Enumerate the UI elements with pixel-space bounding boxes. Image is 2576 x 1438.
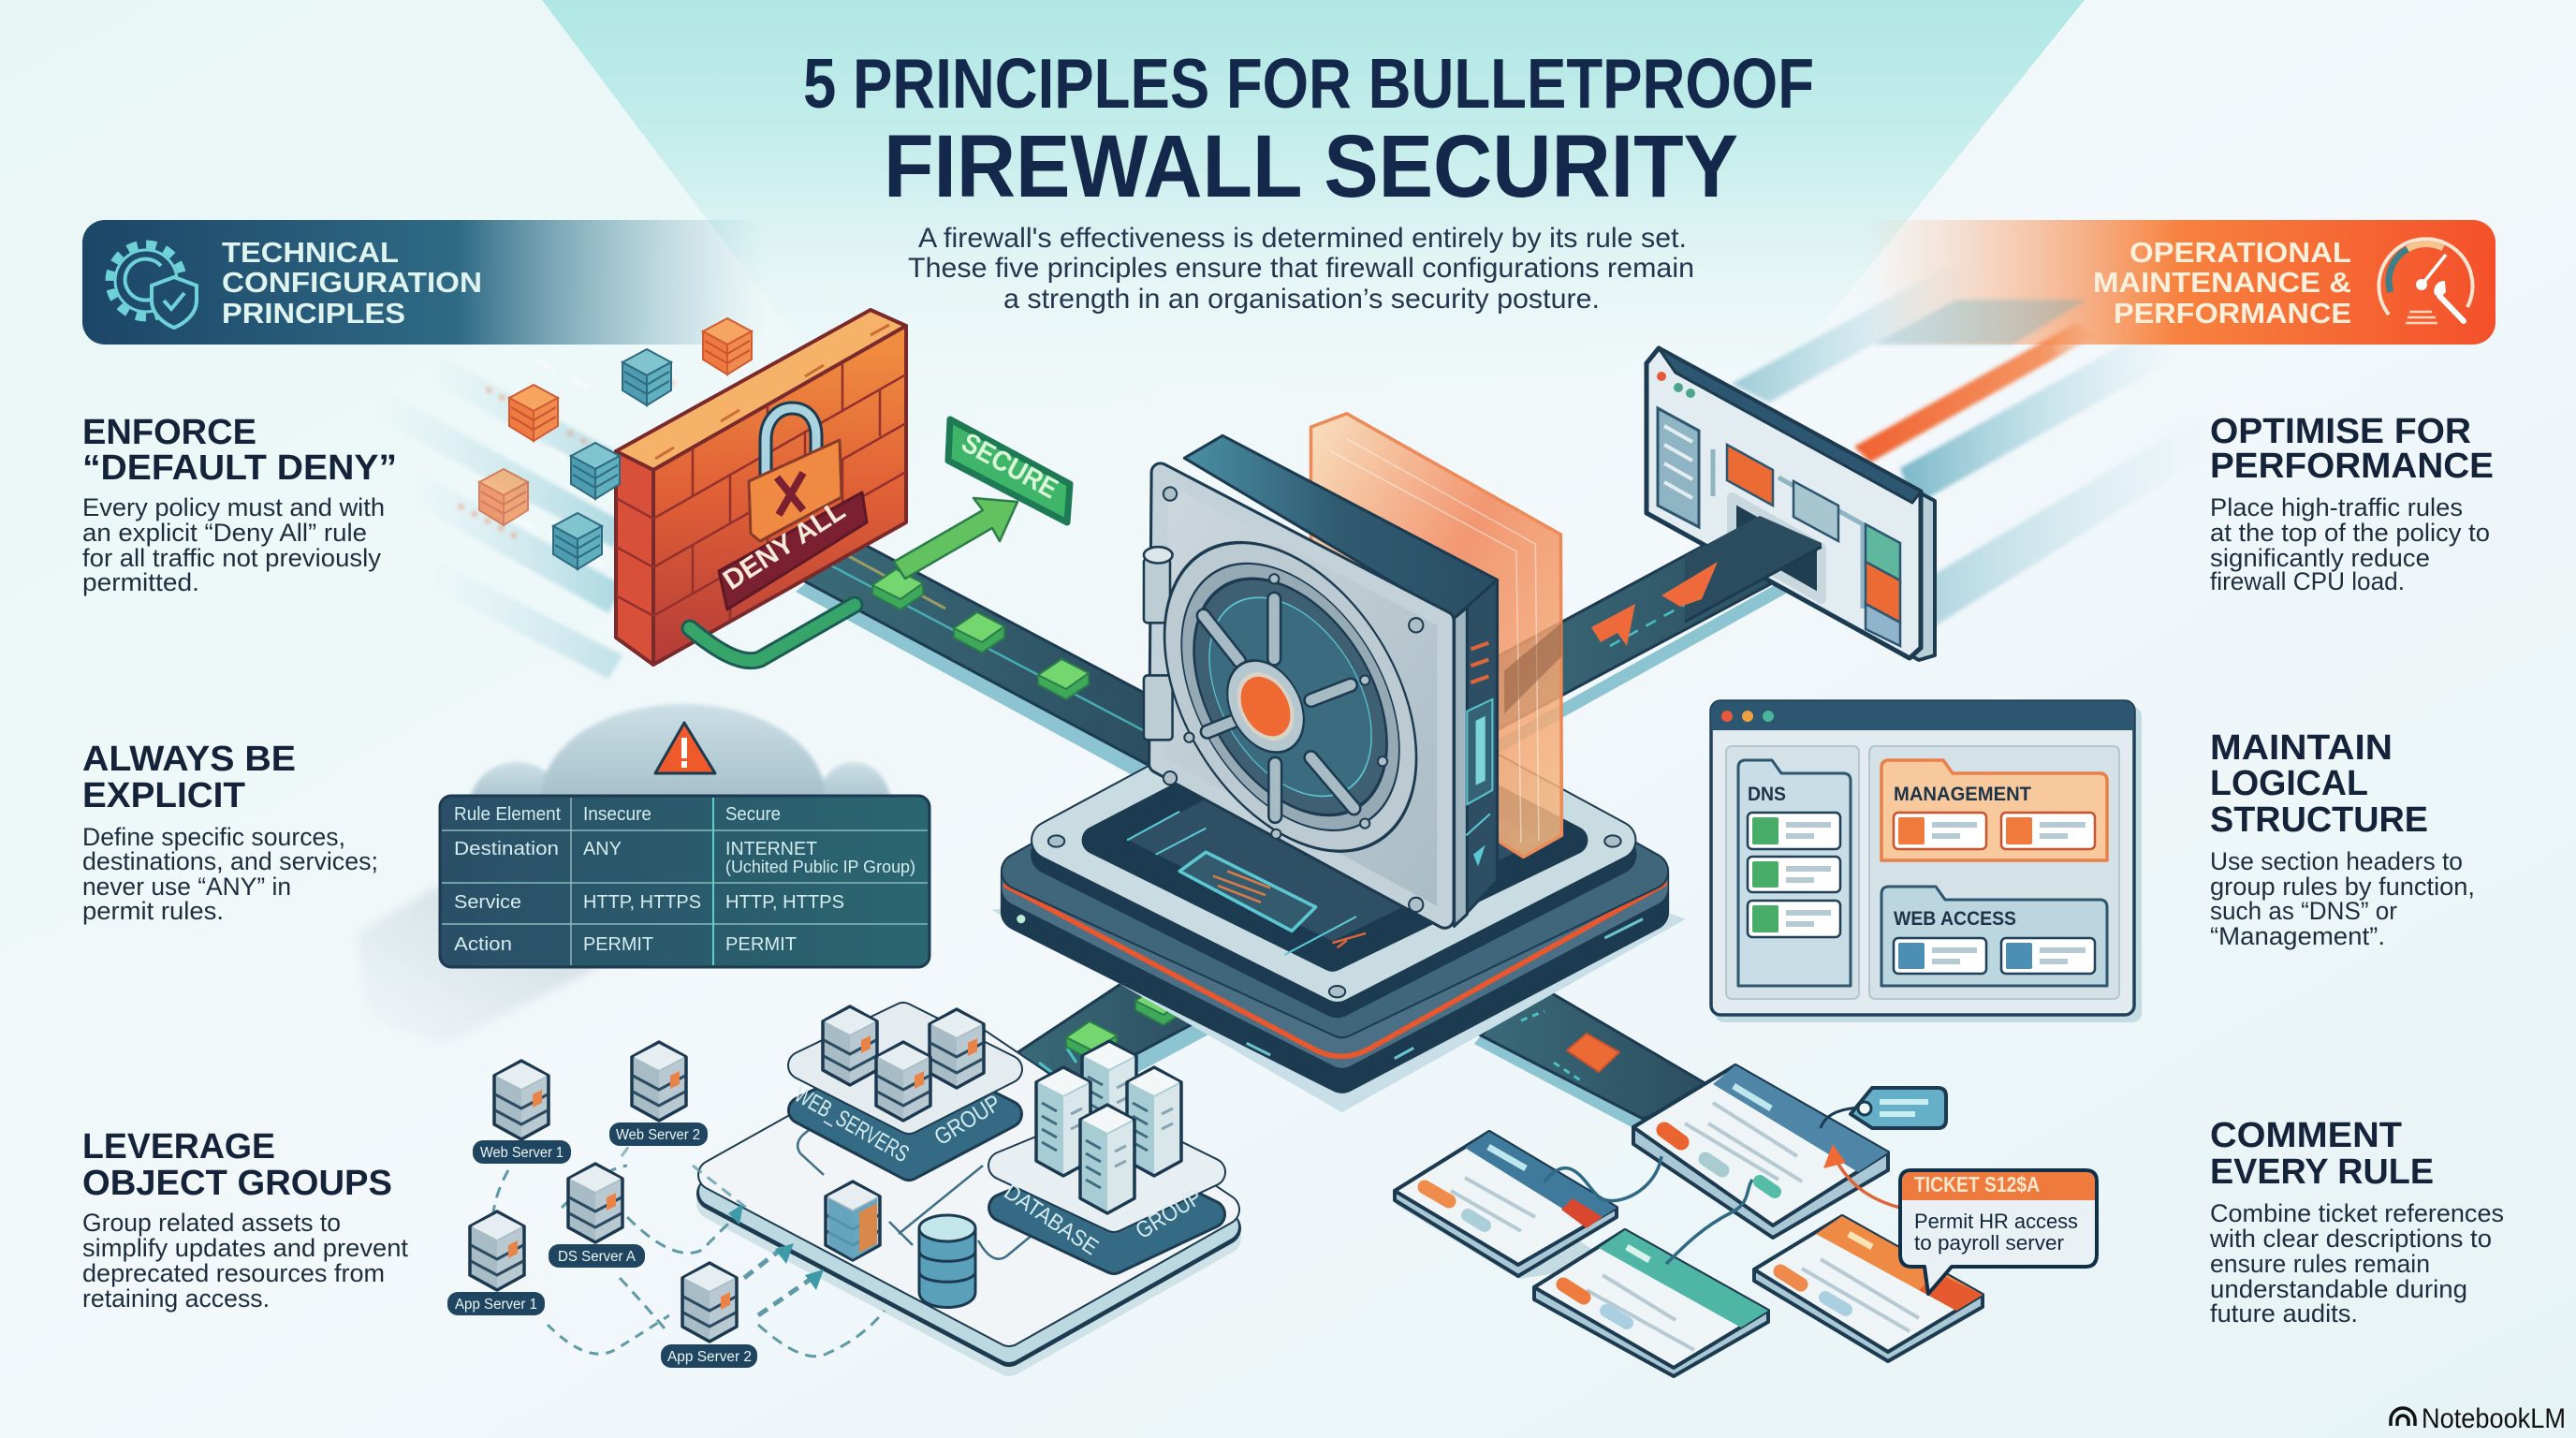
- table rows: HTTP, HTTPS: [725, 892, 844, 913]
- rule list: [1658, 408, 1699, 527]
- shadow: [991, 890, 1686, 1112]
- servers: [1036, 1041, 1181, 1213]
- dashed arrow heads: [728, 1204, 824, 1290]
- secure sign: SECURE: [957, 427, 1063, 505]
- banner label: MAINTENANCE &: [2093, 266, 2351, 299]
- ticket callout: Permit HR access: [1914, 1210, 2078, 1233]
- title: [803, 44, 1814, 216]
- illustration: policy window: [1647, 348, 1935, 660]
- ticket callout: to payroll server: [1914, 1231, 2064, 1255]
- conveyor: vault to object groups: [1014, 974, 1226, 1103]
- card: bottom: [1534, 1230, 1768, 1376]
- illustration: vault on platform: [991, 414, 1686, 1112]
- table rows: Service: [454, 892, 521, 913]
- arrow: ticket to card: [1823, 1144, 1900, 1208]
- db cylinder: [919, 1215, 975, 1307]
- metal plate: [1050, 701, 1617, 998]
- card: top: [1633, 1065, 1888, 1238]
- packet boxes: [872, 569, 1089, 699]
- text: leverage object groups: [82, 1127, 408, 1313]
- traffic packets: [479, 318, 752, 569]
- text: optimise for performance: firewall CPU load.: [2210, 567, 2405, 595]
- banner label: [2093, 236, 2351, 330]
- folder: dns: [1738, 760, 1851, 986]
- left data stream: [374, 354, 674, 679]
- web server 1: [473, 1061, 571, 1164]
- table rows: PERMIT: [583, 934, 653, 955]
- folder: management: MANAGEMENT: [1894, 784, 2031, 805]
- text: maintain logical structure: group rules by function,: [2210, 873, 2475, 901]
- folder: management: [1881, 760, 2107, 860]
- rule sections window: [1711, 701, 2142, 1022]
- title: FIREWALL SECURITY: [884, 117, 1738, 216]
- web server 2: [609, 1042, 708, 1146]
- text: comment every rule: COMMENT: [2210, 1116, 2402, 1155]
- text: optimise for performance: [2210, 412, 2494, 595]
- comment cards: [1395, 1065, 2097, 1376]
- text: enforce default deny: ENFORCE: [82, 413, 256, 452]
- db node: [826, 1181, 880, 1260]
- ds server a: [549, 1164, 645, 1268]
- text: maintain logical structure: STRUCTURE: [2210, 800, 2428, 840]
- window buttons: [1657, 372, 1695, 398]
- banner label: PRINCIPLES: [222, 297, 405, 330]
- text: enforce default deny: “DEFAULT DENY”: [82, 448, 397, 488]
- table header: Rule Element: [454, 804, 561, 825]
- text: comment every rule: EVERY RULE: [2210, 1152, 2434, 1192]
- text: always be explicit: Define specific sources,: [82, 823, 345, 851]
- text: optimise for performance: OPTIMISE FOR: [2210, 412, 2471, 451]
- table rows: Destination: [454, 839, 559, 859]
- tag: [1821, 1088, 1946, 1128]
- banner label: OPERATIONAL: [2130, 236, 2351, 269]
- intro text: a strength in an organisation’s security posture.: [1003, 284, 1600, 315]
- table rows: [454, 839, 915, 955]
- text: enforce default deny: [82, 413, 397, 596]
- rule blocks: [1727, 445, 1900, 646]
- card: left: [1395, 1132, 1617, 1279]
- database group: [1000, 1041, 1211, 1260]
- orange packet: [1567, 1034, 1619, 1072]
- table rows: (Uchited Public IP Group): [725, 858, 915, 876]
- text: always be explicit: destinations, and services;: [82, 847, 378, 875]
- conveyor: vault to rule comments: [1474, 983, 1718, 1128]
- text: enforce default deny: permitted.: [82, 568, 199, 596]
- text: optimise for performance: at the top of the policy to: [2210, 519, 2490, 547]
- app server 1: [447, 1211, 545, 1315]
- arrow: green to secure: [894, 498, 1017, 579]
- wheel hub: [1227, 650, 1304, 764]
- group labels: WEB_SERVERS: [790, 1081, 914, 1167]
- connector frame and slot: [1713, 449, 1863, 609]
- text: optimise for performance: significantly reduce: [2210, 544, 2430, 572]
- icon: gauge and wrench: [2378, 239, 2472, 323]
- text: always be explicit: [82, 740, 378, 925]
- banner label: PERFORMANCE: [2114, 297, 2351, 330]
- banner label: TECHNICAL: [222, 236, 399, 269]
- banner: technical configuration principles: [82, 220, 766, 345]
- padlock: [749, 408, 842, 541]
- platform base: [1019, 695, 1650, 1074]
- text: maintain logical structure: MAINTAIN: [2210, 728, 2393, 768]
- object servers: [447, 1042, 757, 1368]
- connector lines: [798, 1105, 1048, 1259]
- text: optimise for performance: PERFORMANCE: [2210, 447, 2494, 486]
- card: right: [1754, 1216, 1983, 1361]
- web server 1: Web Server 1: [480, 1145, 564, 1161]
- text: comment every rule: Combine ticket references: [2210, 1199, 2504, 1227]
- banner stream overlay: [1854, 300, 2097, 462]
- streak under table: [357, 885, 599, 1045]
- table header: Insecure: [583, 804, 651, 825]
- folder: web access: [1881, 887, 2107, 986]
- text: optimise for performance: Place high-traffic rules: [2210, 493, 2463, 521]
- folder: dns: DNS: [1748, 784, 1786, 805]
- text: comment every rule: future audits.: [2210, 1299, 2358, 1328]
- vault body: [1158, 435, 1497, 926]
- text: leverage object groups: Group related assets to: [82, 1209, 341, 1237]
- text: maintain logical structure: [2210, 728, 2475, 950]
- glass firewall panel: [1311, 414, 1561, 857]
- text: enforce default deny: for all traffic not previously: [82, 544, 382, 572]
- text: maintain logical structure: LOGICAL: [2210, 764, 2368, 803]
- text: leverage object groups: OBJECT GROUPS: [82, 1164, 392, 1203]
- text: comment every rule: with clear descriptions to: [2209, 1225, 2492, 1253]
- warning triangle: [655, 723, 715, 773]
- text: always be explicit: permit rules.: [82, 897, 224, 925]
- table rows: PERMIT: [725, 934, 797, 955]
- text: enforce default deny: Every policy must and with: [82, 493, 385, 521]
- packet boxes: [1066, 985, 1186, 1062]
- text: maintain logical structure: Use section headers to: [2210, 847, 2463, 875]
- title: 5 PRINCIPLES FOR BULLETPROOF: [803, 44, 1814, 123]
- window buttons: [1721, 711, 1774, 722]
- app server 1: App Server 1: [455, 1297, 537, 1313]
- illustration: firewall wall with padlock: [616, 310, 906, 665]
- arrows on policy conveyor: [1591, 562, 1718, 646]
- ds server a: DS Server A: [558, 1249, 637, 1265]
- dashed connections: [492, 1123, 885, 1357]
- table header: Secure: [725, 804, 781, 825]
- text: maintain logical structure: such as “DNS” or: [2210, 897, 2397, 925]
- vault door: [1164, 494, 1416, 900]
- recessed screen: [1096, 716, 1573, 957]
- database group: GROUP: [1131, 1183, 1207, 1244]
- banner: operational maintenance and performance: [1854, 220, 2496, 462]
- text: leverage object groups: deprecated resources from: [82, 1259, 385, 1287]
- web servers group: [790, 1006, 1008, 1167]
- text: leverage object groups: simplify updates and prevent: [82, 1234, 408, 1262]
- banner label: [222, 236, 482, 330]
- arrow: rerouted green pipe: [690, 605, 855, 661]
- plate bolts: [1048, 835, 1621, 997]
- text: leverage object groups: retaining access.: [82, 1284, 270, 1313]
- table rows: HTTP, HTTPS: [583, 892, 701, 913]
- text: comment every rule: understandable during: [2210, 1275, 2467, 1303]
- right data stream: [1732, 267, 2218, 627]
- intro text: [908, 223, 1694, 315]
- group platform: [713, 1034, 1224, 1359]
- text: maintain logical structure: “Management”.: [2210, 922, 2385, 950]
- text: comment every rule: ensure rules remain: [2210, 1250, 2430, 1278]
- icon: gear and shield: [110, 244, 197, 328]
- connector wires: [1544, 1156, 1752, 1264]
- ticket callout: [1900, 1170, 2097, 1294]
- intro text: A firewall's effectiveness is determined entirely by its rule set.: [918, 223, 1687, 254]
- banner label: CONFIGURATION: [222, 266, 482, 299]
- ticket callout: TICKET S12$A: [1914, 1172, 2040, 1196]
- vault hinge: [1144, 547, 1173, 740]
- table header: [454, 804, 781, 825]
- text: comment every rule: [2209, 1116, 2504, 1328]
- text: leverage object groups: LEVERAGE: [82, 1127, 275, 1167]
- folder: web access: WEB ACCESS: [1894, 908, 2016, 930]
- table rows: INTERNET: [725, 839, 817, 859]
- servers: [823, 1006, 984, 1121]
- text: always be explicit: EXPLICIT: [82, 776, 245, 815]
- web server 2: Web Server 2: [616, 1127, 700, 1143]
- rule comparison table: [440, 796, 929, 967]
- group labels: DATABASE: [1000, 1180, 1103, 1260]
- app server 2: [661, 1263, 757, 1368]
- cloud with warning: [470, 704, 891, 891]
- text: enforce default deny: an explicit “Deny All” rule: [82, 519, 367, 547]
- text: always be explicit: ALWAYS BE: [82, 740, 296, 779]
- wheel spokes: [1204, 599, 1354, 816]
- table rows: ANY: [583, 839, 622, 859]
- intro text: These five principles ensure that firewall configurations remain: [908, 253, 1694, 284]
- vault corner bolts: [1164, 487, 1423, 912]
- web servers group: GROUP: [929, 1090, 1005, 1151]
- conveyor: vault to policy window: [1479, 510, 1835, 754]
- deny all banner: DENY ALL: [718, 495, 851, 596]
- app server 2: App Server 2: [667, 1349, 752, 1365]
- conveyor: firewall to vault: [796, 536, 1179, 796]
- text: always be explicit: never use “ANY” in: [82, 873, 291, 901]
- table rows: Action: [454, 934, 512, 955]
